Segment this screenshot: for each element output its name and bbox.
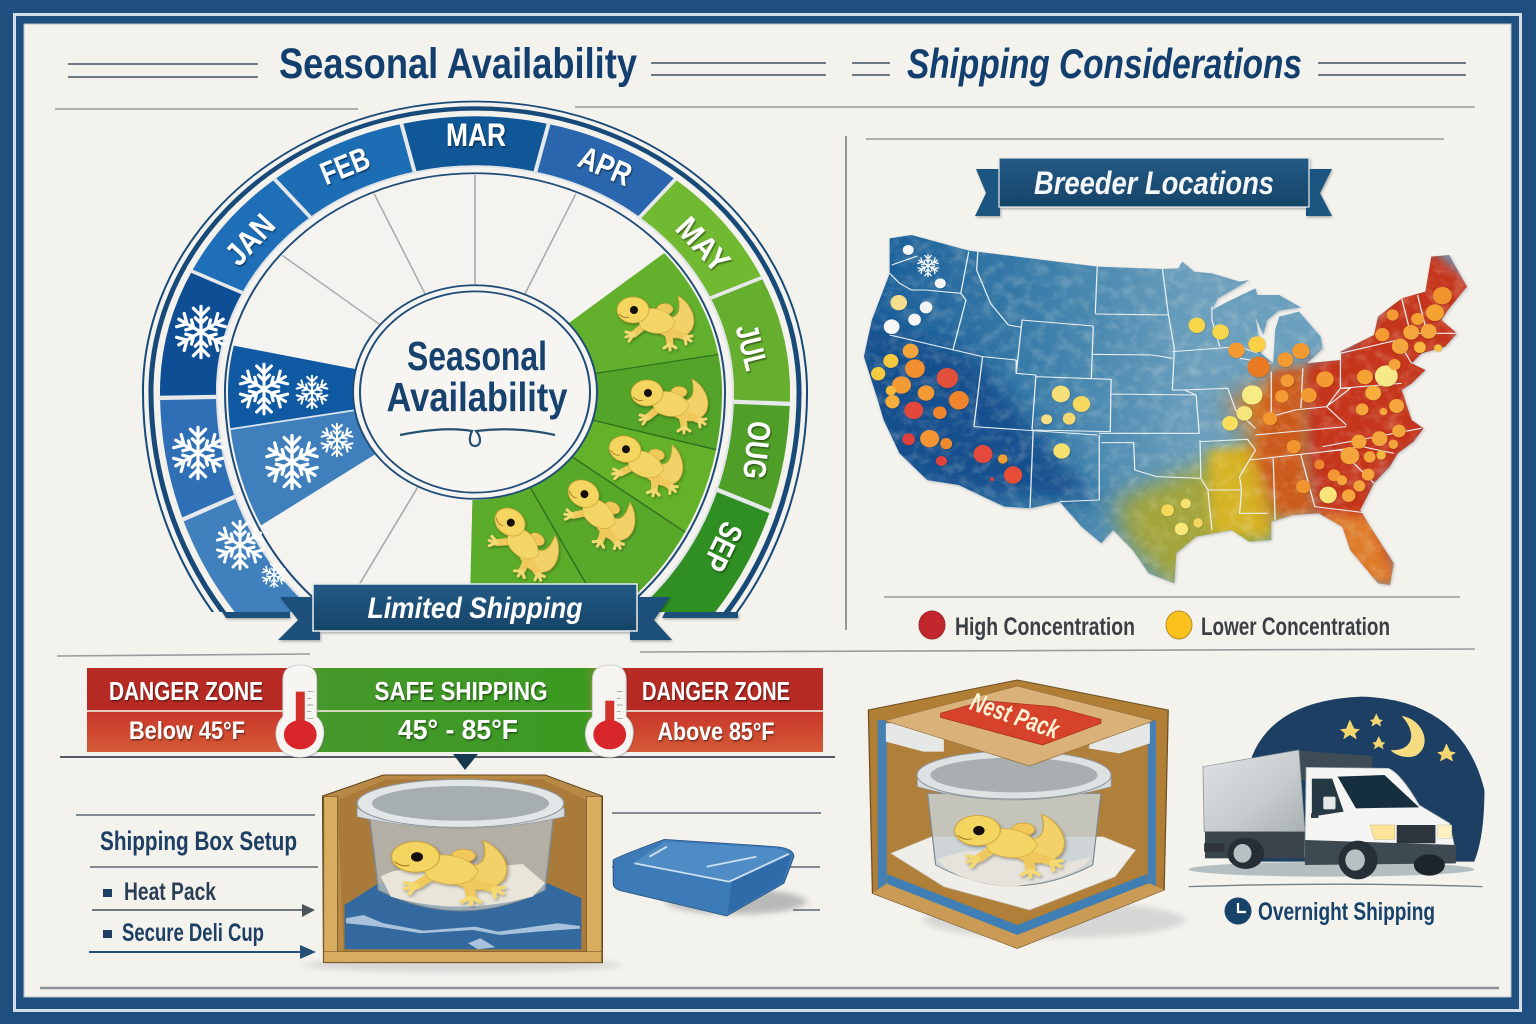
- month labels: SEP: [696, 516, 750, 577]
- banner: Limited Shipping: [222, 584, 738, 640]
- gecko icons on green wedges: [474, 296, 708, 589]
- shipping box cutaway: [304, 775, 806, 972]
- gecko in nest cup: [955, 814, 1064, 877]
- month labels: APR: [573, 139, 637, 193]
- nest pack box: Nest Pack: [967, 686, 1064, 745]
- icon: snowflake on map: [917, 255, 939, 276]
- month labels: [218, 117, 778, 577]
- deli cup: [357, 779, 564, 911]
- heading: Shipping Considerations: Shipping Considerations: [907, 40, 1302, 87]
- bullet: secure deli cup: Secure Deli Cup: [122, 919, 264, 947]
- wheels: [1227, 838, 1264, 869]
- banner: Breeder Locations: [975, 158, 1332, 216]
- safe shipping: 45° - 85°F: [398, 714, 518, 745]
- overnight truck and night sky: [1189, 697, 1484, 887]
- icon: thermometer high: [585, 665, 633, 757]
- shipping box setup labels: [76, 813, 821, 959]
- legend: lower concentration: [1166, 611, 1390, 641]
- month band and outer ring: [142, 100, 808, 612]
- center circle: [353, 285, 597, 499]
- gecko in cup: [392, 840, 507, 904]
- road and shadow: [1189, 884, 1482, 887]
- cold pack block: [613, 839, 806, 916]
- heading: Seasonal Availability: [68, 40, 826, 88]
- icon: clock: [1224, 898, 1252, 924]
- shipping box setup labels: Shipping Box Setup: [100, 826, 297, 856]
- danger zone low: Below 45°F: [129, 717, 245, 745]
- red nest pack label: [941, 701, 1101, 745]
- cardboard box: [323, 775, 602, 963]
- safe shipping: [302, 668, 602, 752]
- icon: thermometer low: [276, 665, 324, 757]
- state boundaries: [890, 252, 1457, 530]
- truck cab: [1305, 767, 1456, 857]
- danger zone low: DANGER ZONE: [109, 676, 263, 706]
- banner: Limited Shipping: Limited Shipping: [368, 592, 582, 625]
- snowflake icons: [172, 306, 353, 587]
- month labels: JUL: [729, 321, 775, 374]
- cold pad: [345, 883, 581, 949]
- legend: high concentration: High Concentration: [955, 613, 1135, 641]
- temperature bar: [87, 668, 823, 752]
- heading: Seasonal Availability: Seasonal Availability: [279, 40, 637, 88]
- center title: [386, 333, 568, 446]
- nest pack box: [868, 680, 1185, 948]
- safe shipping: SAFE SHIPPING: [374, 676, 548, 706]
- overnight shipping label: [1224, 898, 1435, 926]
- arrow: secure deli cup: [89, 945, 316, 959]
- cargo box: [1299, 751, 1372, 780]
- availability wedges: winter limited and summer peak: [228, 175, 722, 593]
- center title: Availability: [386, 374, 568, 420]
- breeder concentration dots: [871, 245, 1452, 535]
- cardboard lid: [885, 686, 1154, 766]
- arrow: safe range pointer: [453, 754, 478, 770]
- month labels: FEB: [315, 140, 375, 192]
- breeder location map: [860, 220, 1477, 593]
- danger zone high: Above 85°F: [658, 718, 774, 746]
- seasonal availability wheel: [142, 100, 1467, 643]
- center title: Seasonal: [407, 333, 547, 379]
- banner: Breeder Locations: Breeder Locations: [1034, 165, 1274, 201]
- bullet: secure deli cup: [103, 919, 264, 947]
- month labels: MAY: [669, 210, 737, 279]
- bullet: heat pack: Heat Pack: [124, 878, 216, 906]
- overnight shipping label: Overnight Shipping: [1258, 898, 1435, 926]
- bullet: heat pack: [103, 878, 216, 906]
- danger zone high: DANGER ZONE: [642, 676, 790, 706]
- night sky: [1252, 697, 1484, 862]
- month labels: MAR: [446, 117, 506, 153]
- map legend: [919, 611, 1390, 641]
- arrow: heat pack: [92, 904, 315, 917]
- danger zone low: [87, 668, 292, 752]
- legend: lower concentration: Lower Concentration: [1201, 613, 1390, 641]
- legend: high concentration: [919, 611, 1135, 641]
- danger zone high: [610, 668, 823, 752]
- map shape with climate gradient: [860, 220, 1477, 593]
- deli cup with airholes: [917, 751, 1111, 887]
- month labels: JAN: [218, 207, 282, 272]
- month labels: OUG: [736, 419, 778, 481]
